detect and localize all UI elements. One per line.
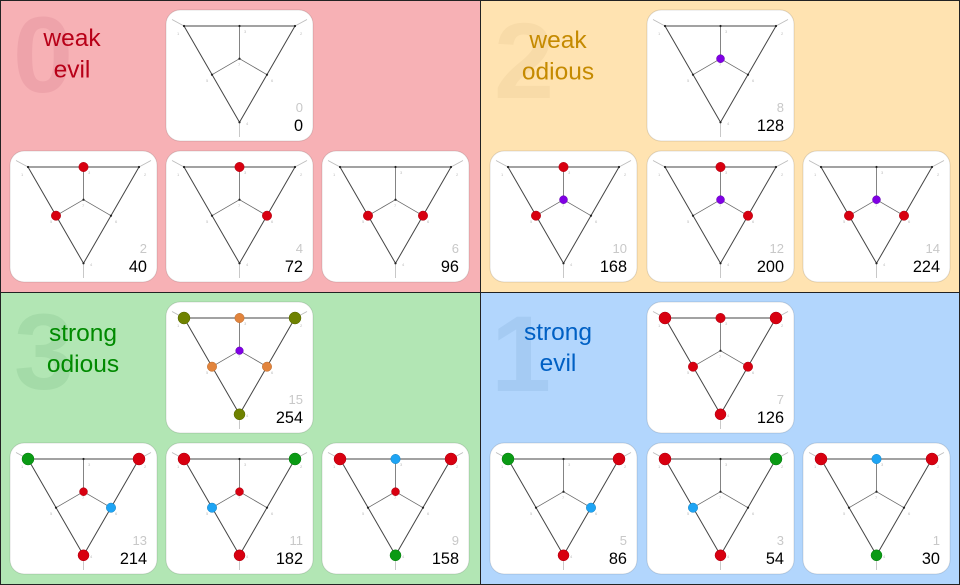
card 10: 3 — [568, 170, 571, 175]
card 10: 6 — [595, 219, 598, 224]
card 0: 0 — [296, 100, 303, 115]
card 1: 6 — [908, 511, 911, 516]
big digit 1: 1 — [491, 293, 551, 414]
card 9: 6 — [427, 511, 430, 516]
heading: strong evil: strong — [524, 319, 592, 346]
card 1 — [803, 443, 950, 574]
card 0: 5 — [206, 78, 209, 83]
card 7: 6 — [752, 370, 755, 375]
card 5: 5 — [620, 533, 627, 548]
card 15: 5 — [206, 370, 209, 375]
card 11: 4 — [246, 554, 249, 559]
card 8: 4 — [727, 121, 730, 126]
card 14: 7 — [875, 203, 878, 208]
card 15: 7 — [238, 354, 241, 359]
card 7: 7 — [777, 392, 784, 407]
card 5 — [490, 443, 637, 574]
card 6 — [322, 151, 469, 282]
card 0: 1 — [177, 31, 180, 36]
card 0: 0 — [294, 117, 303, 135]
card 5: 2 — [624, 464, 627, 469]
card 14 — [803, 151, 950, 282]
card 8: 8 — [777, 100, 784, 115]
card 14: 4 — [883, 262, 886, 267]
card 4: 3 — [244, 170, 247, 175]
card 7: 2 — [781, 323, 784, 328]
card 12: 3 — [725, 170, 728, 175]
card 6: 1 — [333, 172, 336, 177]
card 9: 4 — [402, 554, 405, 559]
card 0 — [166, 10, 313, 141]
card 1: 30 — [922, 550, 940, 568]
card 13: 214 — [120, 550, 147, 568]
card 3: 54 — [766, 550, 784, 568]
card 15 — [166, 302, 313, 433]
card 9: 9 — [452, 533, 459, 548]
card 11: 7 — [238, 495, 241, 500]
card 13: 4 — [90, 554, 93, 559]
card 13 — [10, 443, 157, 574]
card 7: 5 — [687, 370, 690, 375]
card 12: 2 — [781, 172, 784, 177]
card 10: 4 — [570, 262, 573, 267]
card 6: 6 — [452, 241, 459, 256]
card 5: 4 — [570, 554, 573, 559]
card 2: 6 — [115, 219, 118, 224]
card 15: 6 — [271, 370, 274, 375]
heading: strong evil: evil — [540, 350, 576, 377]
card 0: 7 — [238, 62, 241, 67]
card 4: 4 — [246, 262, 249, 267]
card 6: 3 — [400, 170, 403, 175]
card 6: 96 — [441, 258, 459, 276]
card 5: 7 — [562, 495, 565, 500]
card 0: 2 — [300, 31, 303, 36]
card 15: 4 — [246, 413, 249, 418]
heading: weak odious: weak — [528, 27, 587, 54]
card 15: 3 — [244, 321, 247, 326]
card 9: 3 — [400, 462, 403, 467]
card 13: 1 — [21, 464, 24, 469]
card 1: 1 — [933, 533, 940, 548]
card 2: 2 — [144, 172, 147, 177]
card 13: 13 — [133, 533, 147, 548]
panel: weak evil — [0, 0, 480, 292]
panel: weak odious — [480, 0, 960, 292]
card 5: 86 — [609, 550, 627, 568]
card 9: 158 — [432, 550, 459, 568]
card 1: 2 — [937, 464, 940, 469]
card 0: 4 — [246, 121, 249, 126]
card 11: 11 — [290, 533, 303, 548]
card 1: 7 — [875, 495, 878, 500]
card 7: 1 — [658, 323, 661, 328]
card 6: 6 — [427, 219, 430, 224]
card 15: 15 — [289, 392, 303, 407]
card 4: 1 — [177, 172, 180, 177]
card 5: 1 — [501, 464, 504, 469]
card 5: 6 — [595, 511, 598, 516]
card 14: 1 — [814, 172, 817, 177]
card 1: 1 — [814, 464, 817, 469]
card 14: 14 — [926, 241, 940, 256]
card 13: 3 — [88, 462, 91, 467]
card 4 — [166, 151, 313, 282]
card 11: 5 — [206, 511, 209, 516]
card 11: 2 — [300, 464, 303, 469]
card 11 — [166, 443, 313, 574]
card 2: 7 — [82, 203, 85, 208]
card 8: 128 — [757, 117, 784, 135]
card 3: 4 — [727, 554, 730, 559]
card 12: 200 — [757, 258, 784, 276]
card 6: 4 — [402, 262, 405, 267]
card 8: 6 — [752, 78, 755, 83]
card 13: 5 — [50, 511, 53, 516]
card 7: 126 — [757, 409, 784, 427]
card 13: 6 — [115, 511, 118, 516]
card 14: 6 — [908, 219, 911, 224]
card 7: 3 — [725, 321, 728, 326]
card 9: 7 — [394, 495, 397, 500]
card 11: 3 — [244, 462, 247, 467]
card 7: 7 — [719, 354, 722, 359]
card 9: 5 — [362, 511, 365, 516]
card 2 — [10, 151, 157, 282]
panel: strong odious — [0, 291, 480, 584]
card 6: 2 — [456, 172, 459, 177]
heading: strong odious: strong — [49, 320, 117, 347]
card 0: 3 — [244, 29, 247, 34]
card 14: 2 — [937, 172, 940, 177]
card 5: 5 — [530, 511, 533, 516]
card 10: 1 — [501, 172, 504, 177]
card 4: 2 — [300, 172, 303, 177]
card 4: 72 — [285, 258, 303, 276]
card 4: 4 — [296, 241, 303, 256]
card 10: 10 — [613, 241, 627, 256]
card 9: 1 — [333, 464, 336, 469]
card 7: 4 — [727, 413, 730, 418]
card 12: 4 — [727, 262, 730, 267]
card 10: 168 — [600, 258, 627, 276]
heading: weak evil: weak — [42, 25, 101, 52]
card 11: 182 — [276, 550, 303, 568]
card 10 — [490, 151, 637, 282]
card 12 — [647, 151, 794, 282]
card 11: 1 — [177, 464, 180, 469]
card 13: 2 — [144, 464, 147, 469]
card 2: 40 — [129, 258, 147, 276]
card 3: 7 — [719, 495, 722, 500]
card 2: 5 — [50, 219, 53, 224]
card 5: 3 — [568, 462, 571, 467]
card 3: 3 — [725, 462, 728, 467]
card 15: 2 — [300, 323, 303, 328]
heading: weak evil: evil — [54, 56, 90, 84]
card 3: 6 — [752, 511, 755, 516]
card 8: 2 — [781, 31, 784, 36]
card 10: 5 — [530, 219, 533, 224]
card 12: 7 — [719, 203, 722, 208]
card 4: 7 — [238, 203, 241, 208]
card 4: 6 — [271, 219, 274, 224]
card 2: 3 — [88, 170, 91, 175]
card 3: 3 — [777, 533, 784, 548]
card 11: 6 — [271, 511, 274, 516]
card 6: 5 — [362, 219, 365, 224]
card 3: 1 — [658, 464, 661, 469]
card 12: 12 — [770, 241, 784, 256]
card 13: 7 — [82, 495, 85, 500]
heading: weak odious: odious — [522, 58, 594, 86]
card 12: 1 — [658, 172, 661, 177]
card 4: 5 — [206, 219, 209, 224]
card 10: 7 — [562, 203, 565, 208]
card 8 — [647, 10, 794, 141]
card 1: 5 — [843, 511, 846, 516]
card 14: 5 — [843, 219, 846, 224]
big digit 2: 2 — [494, 0, 554, 121]
card 15: 254 — [276, 409, 303, 427]
card 3 — [647, 443, 794, 574]
card 1: 4 — [883, 554, 886, 559]
card 9 — [322, 443, 469, 574]
card 3: 2 — [781, 464, 784, 469]
card 14: 3 — [881, 170, 884, 175]
card 2: 4 — [90, 262, 93, 267]
card 6: 7 — [394, 203, 397, 208]
heading: strong odious: odious — [47, 351, 119, 378]
card 12: 5 — [687, 219, 690, 224]
card 15: 1 — [177, 323, 180, 328]
card 10: 2 — [624, 172, 627, 177]
card 14: 224 — [913, 258, 940, 276]
card 2: 1 — [21, 172, 24, 177]
card 2: 2 — [140, 241, 147, 256]
card 0: 6 — [271, 78, 274, 83]
card 7 — [647, 302, 794, 433]
card 3: 5 — [687, 511, 690, 516]
card 8: 1 — [658, 31, 661, 36]
card 9: 2 — [456, 464, 459, 469]
big digit 3: 3 — [14, 291, 74, 412]
card 1: 3 — [881, 462, 884, 467]
card 12: 6 — [752, 219, 755, 224]
card 8: 7 — [719, 62, 722, 67]
panel: strong evil — [480, 292, 960, 584]
card 8: 3 — [725, 29, 728, 34]
card 8: 5 — [687, 78, 690, 83]
